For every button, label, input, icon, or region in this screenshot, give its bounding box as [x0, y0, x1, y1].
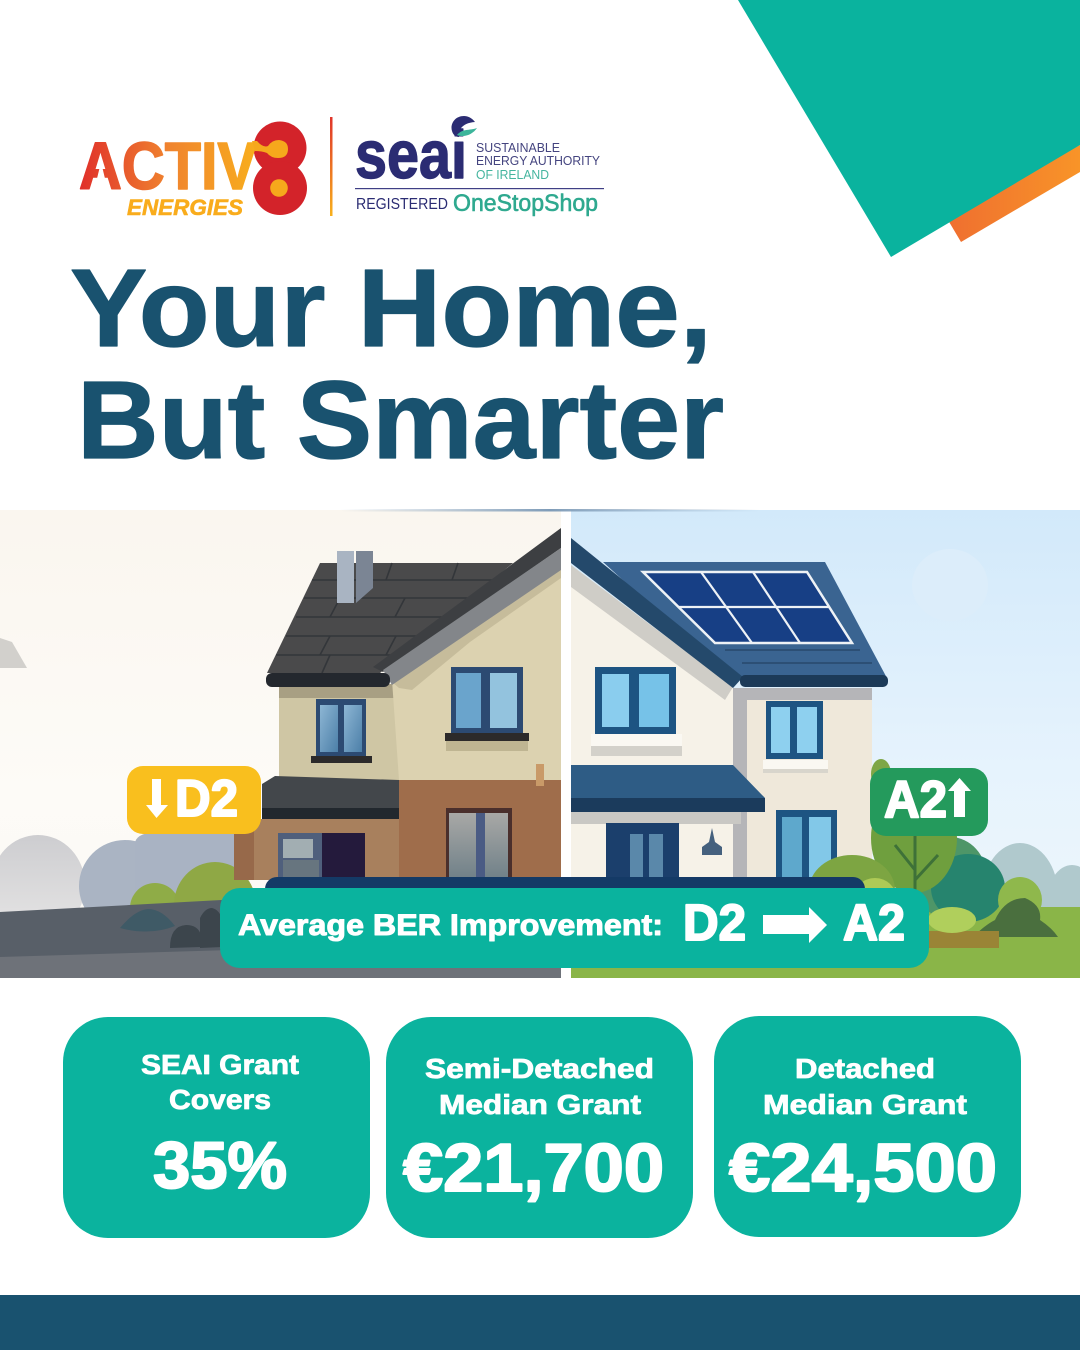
- gable wall: [571, 565, 733, 880]
- dark front door: [322, 833, 365, 880]
- lower right window: [446, 808, 512, 880]
- brick wall: [399, 780, 561, 880]
- gable wall: [392, 562, 561, 780]
- planter: [927, 931, 999, 948]
- main roof: [603, 562, 888, 680]
- faint top edge: [340, 509, 760, 512]
- card heading: Semi-Detached: [425, 1053, 654, 1084]
- logo: Activ8 Energies: [79, 122, 307, 220]
- upper right window: [763, 701, 828, 773]
- corner accent shapes: [738, 0, 1080, 257]
- registered one stop shop line: [356, 190, 598, 217]
- dark shrub: [973, 898, 1058, 937]
- card: semi-detached median grant: [386, 1017, 693, 1238]
- logo A cut-out: [94, 162, 108, 191]
- badge: D2 rating: [127, 766, 261, 834]
- faint cloud: [912, 549, 988, 621]
- logo figure 8: [253, 122, 307, 215]
- card value: €21,700: [403, 1130, 664, 1206]
- icon: right arrow: [763, 907, 827, 943]
- lower right window: [776, 810, 837, 880]
- white divider: [561, 510, 571, 978]
- card heading: [141, 1049, 299, 1115]
- garden: trees and shrubs: [809, 759, 1058, 948]
- seai full name: ENERGY AUTHORITY: [476, 154, 601, 168]
- gable shadow: [392, 565, 561, 690]
- title: Your Home,: [70, 247, 712, 370]
- card heading: SEAI Grant: [141, 1049, 299, 1080]
- after side hills: [982, 843, 1080, 947]
- eave: [266, 673, 390, 687]
- banner D2: D2: [683, 894, 746, 951]
- logo divider: [330, 117, 332, 216]
- footer bar: [0, 1295, 1080, 1350]
- teal bushes: [913, 837, 1005, 922]
- card: detached median grant: [714, 1016, 1021, 1237]
- teal corner shape: [738, 0, 1080, 257]
- logos: [79, 116, 604, 220]
- badge text D2: D2: [175, 770, 238, 828]
- dark barge board: [373, 528, 561, 672]
- logo wordmark ACTIV: ACTIV: [79, 129, 257, 204]
- badge text A2: A2: [884, 771, 947, 829]
- seai full name: [476, 141, 601, 182]
- eave: [740, 675, 888, 687]
- upper left window: [591, 667, 682, 756]
- banner: average BER improvement: [220, 888, 929, 968]
- bushes: [130, 862, 256, 948]
- before side background: [0, 510, 561, 978]
- seai wordmark: seai: [355, 117, 467, 193]
- grey lower window: [278, 833, 322, 880]
- grey barge board: [383, 548, 561, 685]
- lower roof: [262, 776, 399, 819]
- wall lamp: [702, 828, 722, 855]
- porch roof: [571, 765, 765, 812]
- icon: up arrow: [948, 778, 971, 817]
- card heading: Median Grant: [763, 1089, 967, 1120]
- barge board: [571, 538, 743, 688]
- title: But Smarter: [77, 359, 724, 482]
- front door: [606, 823, 679, 880]
- lime bush: [998, 877, 1042, 923]
- badge: A2 rating: [870, 768, 988, 836]
- retrofitted house: [571, 538, 888, 880]
- road: [0, 899, 561, 978]
- lime shrub: [928, 907, 976, 933]
- roof courses: [725, 650, 872, 663]
- icon: down arrow: [146, 779, 168, 818]
- registered one stop shop line: OneStopShop: [453, 190, 598, 217]
- card heading: [425, 1053, 654, 1120]
- main roof: [267, 563, 513, 673]
- old house: [234, 528, 561, 880]
- illustration: before and after house: [0, 509, 1080, 978]
- card heading: [763, 1053, 967, 1120]
- banner A2: A2: [843, 894, 905, 951]
- solar panel: [643, 572, 852, 643]
- orange accent strip: [945, 145, 1080, 242]
- upper wall: [279, 684, 399, 780]
- title: [70, 247, 724, 482]
- logo word ENERGIES: ENERGIES: [127, 195, 243, 220]
- lawn: [850, 907, 1080, 978]
- banner label: Average BER Improvement:: [238, 909, 663, 942]
- card: SEAI grant covers: [63, 1017, 370, 1238]
- porch shade: [571, 812, 741, 824]
- card heading: Detached: [795, 1053, 935, 1084]
- upper left window: [311, 699, 372, 763]
- registered one stop shop line: REGISTERED: [356, 196, 448, 213]
- front bush: [809, 855, 897, 925]
- logo 8 connector: [252, 140, 288, 158]
- logo: SEAI: [355, 116, 604, 217]
- card value: €24,500: [729, 1130, 997, 1206]
- gable shadow: [571, 565, 733, 700]
- upper right window: [445, 667, 529, 751]
- card heading: Covers: [169, 1084, 271, 1115]
- navy strip behind banner: [265, 877, 865, 907]
- seai full name: SUSTAINABLE: [476, 141, 560, 155]
- after side background: [571, 510, 1080, 978]
- right wall: [733, 688, 872, 880]
- card value: 35%: [153, 1128, 287, 1202]
- seai swoosh icon: [452, 116, 477, 137]
- lower wall: [234, 819, 399, 880]
- card heading: Median Grant: [439, 1089, 641, 1120]
- roof shingle lines: [276, 563, 492, 673]
- tree: [871, 759, 957, 895]
- downpipe bracket: [536, 764, 544, 786]
- chimney: [337, 551, 373, 603]
- seai full name: OF IRELAND: [476, 168, 549, 182]
- distant hills: [0, 832, 240, 935]
